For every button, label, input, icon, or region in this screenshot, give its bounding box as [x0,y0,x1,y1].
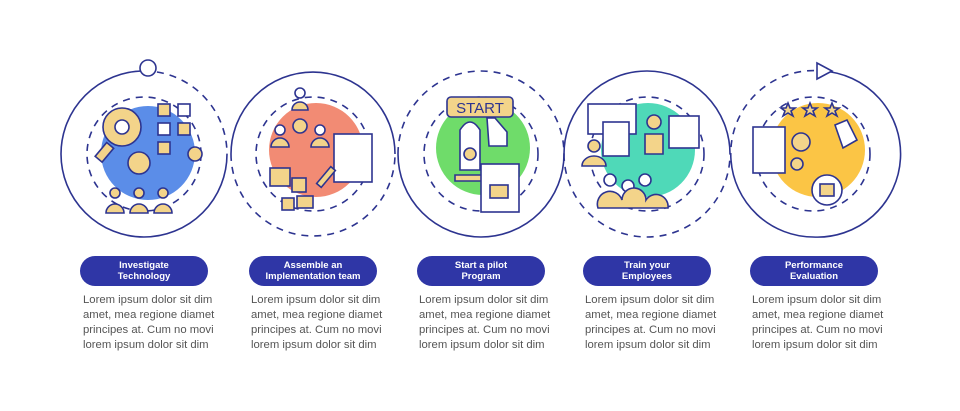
text: step 4: principes at. Cum no movi [585,324,716,336]
pill: step 2 [249,256,377,286]
pill: step 2: Assemble an [284,260,342,270]
text: step 1: lorem ipsum dolor sit dim [83,339,209,351]
text: step 2: principes at. Cum no movi [251,324,382,336]
icon: team & puzzle [270,88,372,210]
pill: step 5 [750,256,878,286]
text: step 3 [419,294,550,351]
text: step 1 [83,294,214,351]
icon: training [582,104,699,208]
text: step 2: amet, mea regione diamet [251,309,382,321]
pill: step 3: Program [461,271,501,282]
pill: step 4: Employees [622,271,672,282]
step 4 circle [564,71,730,237]
text: step 4 [585,294,716,351]
text: step 4: Lorem ipsum dolor sit dim [585,294,714,306]
pill: step 1 [80,256,208,286]
text: step 5: lorem ipsum dolor sit dim [752,339,878,351]
icon: start, rocket, calendar [447,97,519,212]
step 3 circle [398,71,564,237]
text: step 2: lorem ipsum dolor sit dim [251,339,377,351]
icon: magnifier & flowchart [95,104,202,213]
text: step 2 [251,294,382,351]
pill: step 4 [583,256,711,286]
step 1 circle [61,60,227,237]
text: step 1: Lorem ipsum dolor sit dim [83,294,212,306]
text: step 5 [752,294,884,351]
text: step 5: Lorem ipsum dolor sit dim [752,294,881,306]
pill: step 1: Technology [118,271,170,282]
pill: step 4: Train your [624,260,670,270]
step 2 circle [231,72,395,236]
text: step 2: Lorem ipsum dolor sit dim [251,294,380,306]
text: step 1: principes at. Cum no movi [83,324,214,336]
pill: step 5: Performance [785,260,843,270]
text: step 3: lorem ipsum dolor sit dim [419,339,545,351]
pill: step 1: Investigate [119,260,169,270]
text: step 3: amet, mea regione diamet [419,309,550,321]
icon: evaluation [753,103,857,205]
step 3 circle: START [456,100,504,117]
pill: step 5: Evaluation [790,271,838,282]
pill: step 2: Implementation team [265,271,361,282]
text: step 3: principes at. Cum no movi [419,324,550,336]
text: step 5: amet, mea regione diamet [752,309,883,321]
pill: step 3 [417,256,545,286]
text: step 4: lorem ipsum dolor sit dim [585,339,711,351]
text: step 1: amet, mea regione diamet [83,309,214,321]
pill: step 3: Start a pilot [455,260,507,270]
text: step 3: Lorem ipsum dolor sit dim [419,294,548,306]
text: step 4: amet, mea regione diamet [585,309,716,321]
step 5 circle [731,63,901,237]
text: step 5: principes at. Cum no movi [752,324,883,336]
